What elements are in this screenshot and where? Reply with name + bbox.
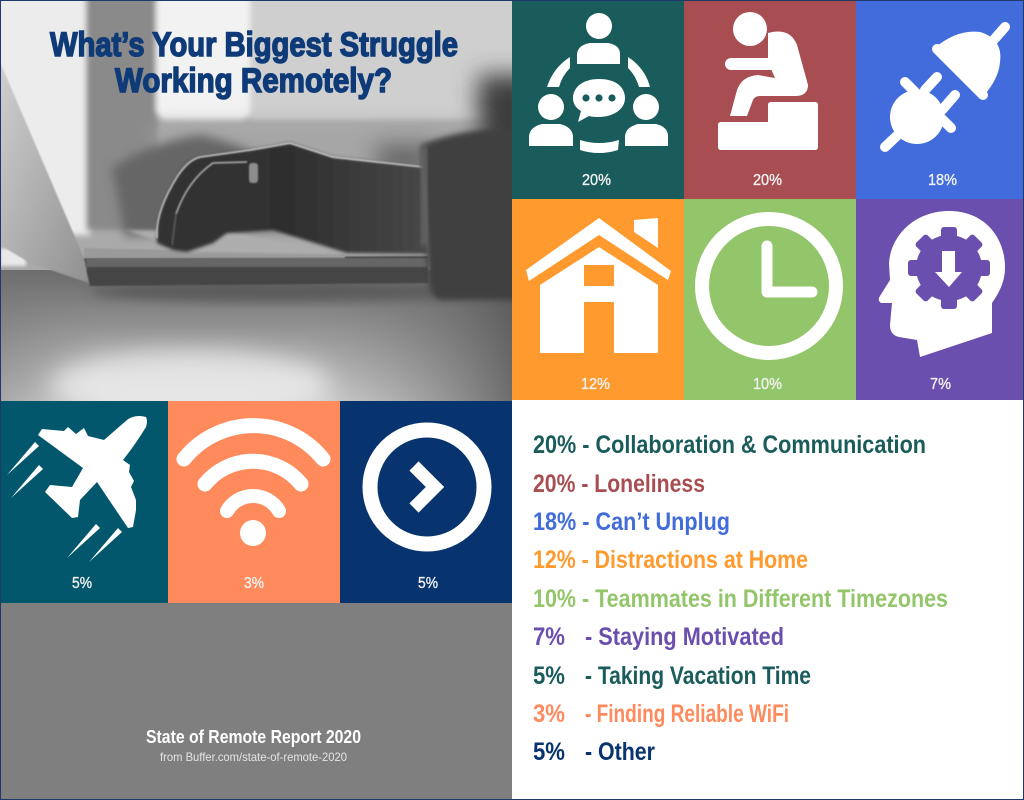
item: wifi: 3% bbox=[533, 700, 565, 728]
item: unplug: 18% - Can’t Unplug bbox=[533, 508, 730, 536]
panel: reliable wifi 3% bbox=[168, 401, 340, 603]
panel: vacation time 5% bbox=[0, 401, 168, 603]
icon: person sitting alone bbox=[718, 12, 818, 150]
value 5%: 5% bbox=[418, 575, 438, 592]
value 18%: 18% bbox=[928, 172, 957, 189]
item: wifi bbox=[533, 700, 789, 728]
value 20%: 20% bbox=[582, 172, 611, 189]
panel: source footer bbox=[0, 603, 512, 800]
coffee mug bbox=[421, 128, 520, 300]
item: motivation: 7% bbox=[533, 623, 565, 651]
source title: State of Remote Report 2020 bbox=[146, 727, 361, 747]
value 10%: 10% bbox=[753, 376, 782, 393]
item: distractions: 12% - Distractions at Home bbox=[533, 546, 808, 574]
icon: unplugged cable bbox=[885, 27, 1005, 147]
item: other: 5% bbox=[533, 738, 565, 766]
item: loneliness: 20% - Loneliness bbox=[533, 470, 705, 498]
legend list bbox=[533, 431, 948, 766]
item: vacation: - Taking Vacation Time bbox=[585, 662, 811, 690]
title: What’s Your Biggest Struggle bbox=[50, 26, 458, 64]
icon: chevron in circle bbox=[370, 430, 484, 544]
panel: timezones 10% bbox=[684, 199, 856, 400]
icon: clock bbox=[702, 219, 836, 353]
foreground hand bbox=[157, 143, 428, 254]
item: wifi: - Finding Reliable WiFi bbox=[585, 700, 789, 728]
title bbox=[50, 26, 458, 100]
item: collaboration: 20% - Collaboration & Communication bbox=[533, 431, 926, 459]
value 3%: 3% bbox=[244, 575, 264, 592]
panel: unplug 18% bbox=[856, 0, 1024, 199]
value 20%: 20% bbox=[753, 172, 782, 189]
value 5%: 5% bbox=[72, 575, 92, 592]
value 12%: 12% bbox=[581, 376, 610, 393]
panel: collaboration 20% bbox=[512, 0, 684, 199]
title: Working Remotely? bbox=[115, 62, 392, 100]
source url: from Buffer.com/state-of-remote-2020 bbox=[160, 750, 347, 764]
laptop screen bbox=[0, 62, 89, 283]
icon: head with gear bbox=[879, 211, 1005, 357]
photo: hands typing on laptop bbox=[0, 0, 538, 420]
panel: distractions at home 12% bbox=[512, 199, 684, 400]
item: timezones: 10% - Teammates in Different Timezones bbox=[533, 585, 948, 613]
panel: motivation 7% bbox=[856, 199, 1024, 400]
icon: wifi bbox=[184, 426, 323, 546]
item: other: - Other bbox=[585, 738, 655, 766]
item: motivation: - Staying Motivated bbox=[585, 623, 784, 651]
keyboard bbox=[84, 248, 345, 258]
background blurred hand bbox=[112, 135, 300, 236]
item: vacation: 5% bbox=[533, 662, 565, 690]
laptop base bbox=[84, 256, 428, 286]
panel: loneliness 20% bbox=[684, 0, 856, 199]
icon: team discussion bbox=[529, 13, 668, 153]
panel: other 5% bbox=[340, 401, 512, 603]
icon: airplane bbox=[7, 416, 147, 562]
item: other bbox=[533, 738, 655, 766]
value 7%: 7% bbox=[930, 376, 951, 393]
table surface bbox=[0, 270, 512, 402]
icon: house bbox=[526, 218, 671, 353]
